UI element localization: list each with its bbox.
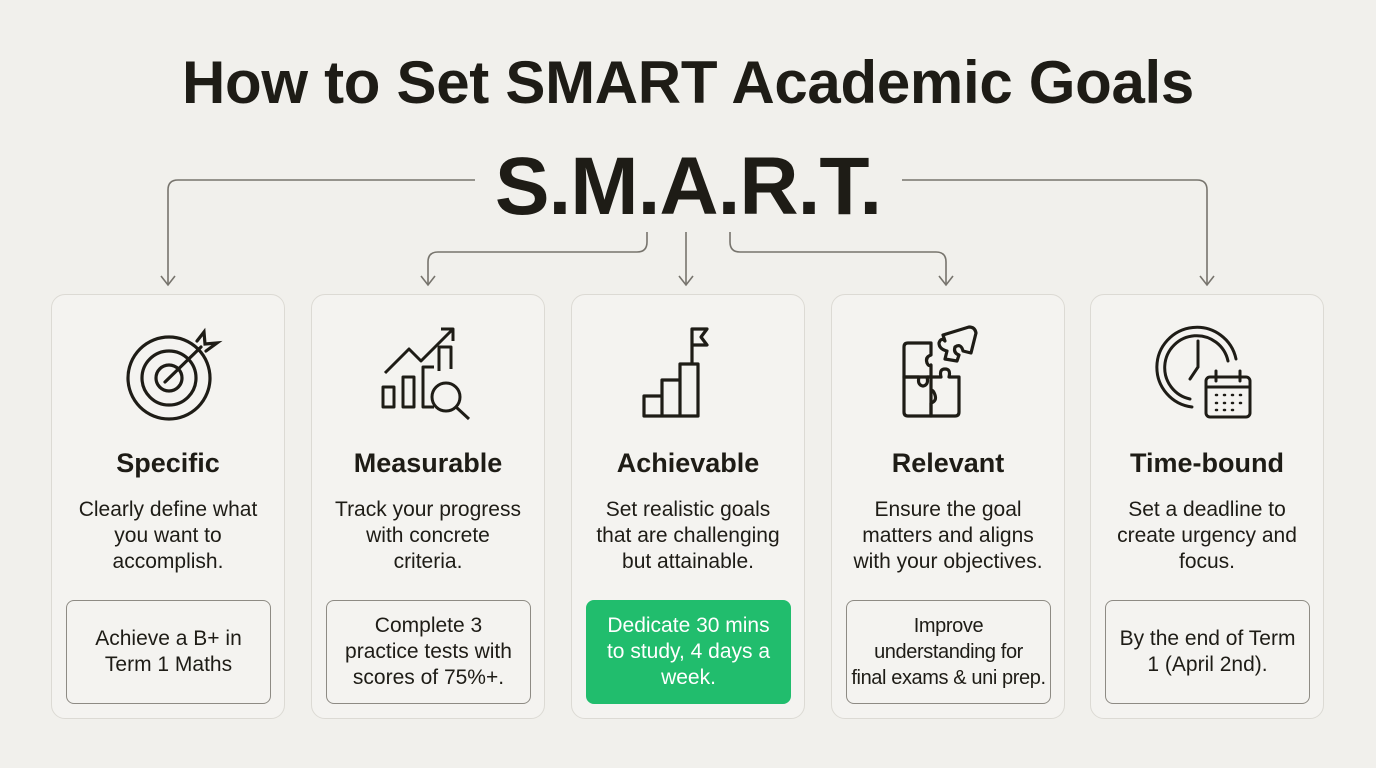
panel: Achievable: but attainable. — [622, 550, 754, 573]
panel: Measurable: Measurable — [354, 448, 502, 478]
panel: Relevant: with your objectives. — [853, 550, 1043, 573]
panel: Relevant: Improve — [914, 615, 983, 637]
panel: Achievable: that are challenging — [596, 524, 780, 547]
panel: Specific: accomplish. — [113, 550, 223, 573]
panel: Specific: Term 1 Maths — [105, 653, 232, 676]
panel: Measurable — [311, 294, 545, 719]
panel: Measurable: with concrete — [366, 524, 490, 547]
heading: S.M.A.R.T.: S.M.A.R.T. — [495, 141, 881, 232]
panel: Relevant — [831, 294, 1065, 719]
icon: target — [126, 328, 222, 421]
title: How to Set SMART Academic Goals — [182, 49, 1194, 116]
panel: Achievable — [571, 294, 805, 719]
panel: Relevant: matters and aligns — [862, 524, 1034, 547]
panel: Specific: Clearly define what — [79, 498, 257, 521]
icon: chart with magnifier — [382, 328, 470, 420]
panel: Time-bound: focus. — [1179, 550, 1235, 573]
panel: Achievable: Achievable — [617, 448, 759, 478]
panel: Measurable: Complete 3 — [375, 614, 482, 637]
panel: Time-bound: 1 (April 2nd). — [1147, 653, 1268, 676]
panel: Relevant: Relevant — [892, 448, 1004, 478]
panel: Achievable: Set realistic goals — [606, 498, 770, 521]
panel: Measurable: practice tests with — [345, 640, 512, 663]
panel: Specific: Achieve a B+ in — [95, 627, 242, 650]
icon: clock and calendar — [1155, 326, 1252, 418]
panel: Specific: Specific — [116, 448, 220, 478]
panel: Time-bound: create urgency and — [1117, 524, 1297, 547]
connector arrows — [160, 179, 1214, 286]
panel: Specific — [51, 294, 285, 719]
panel: Specific: you want to — [114, 524, 222, 547]
panel: Time-bound: By the end of Term — [1120, 627, 1295, 650]
panel: Relevant: final exams & uni prep. — [851, 667, 1046, 689]
panel: Achievable: Dedicate 30 mins — [607, 614, 770, 637]
panel: Time-bound: Time-bound — [1130, 448, 1284, 478]
panel: Relevant: understanding for — [874, 641, 1023, 663]
panel: Achievable: week. — [661, 666, 716, 689]
panel: Time-bound: Set a deadline to — [1128, 498, 1286, 521]
panel: Time-bound — [1090, 294, 1324, 719]
panel: Measurable: criteria. — [394, 550, 462, 573]
panel: Measurable: scores of 75%+. — [353, 666, 504, 689]
icon: steps with flag — [642, 327, 709, 418]
panel: Measurable: Track your progress — [335, 498, 521, 521]
panel: Relevant: Ensure the goal — [874, 498, 1022, 521]
icon: puzzle — [902, 325, 978, 418]
panel: Achievable: to study, 4 days a — [607, 640, 770, 663]
